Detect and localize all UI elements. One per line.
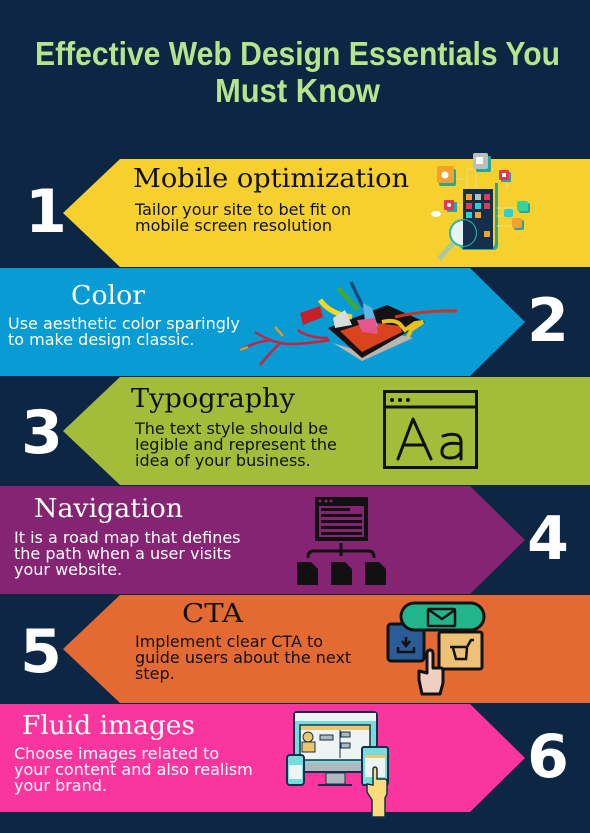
text: color: Use aesthetic color sparingly: [8, 314, 240, 333]
panel: mobile optimization: [25, 153, 590, 267]
text: typography: [134, 419, 337, 470]
heading: fluid images: Fluid images: [22, 711, 195, 741]
panel: fluid images: [0, 704, 569, 817]
text: cta: Implement clear CTA to: [135, 632, 323, 651]
icon: mobile apps: [431, 153, 530, 259]
icon: typeface window: [384, 392, 477, 468]
illustration: paint splash: [240, 282, 457, 365]
text: color: [8, 314, 240, 349]
number 3: 3: [21, 398, 63, 468]
heading: typography: Typography: [131, 384, 295, 414]
title: Must Know: [215, 72, 380, 109]
text: typography: legible and represent the: [135, 435, 337, 454]
heading: cta: CTA: [182, 599, 244, 629]
text: fluid images: your brand.: [14, 776, 107, 795]
text: navigation: [14, 528, 241, 579]
text: typography: idea of your business.: [135, 451, 311, 470]
icon: site map: [297, 497, 386, 585]
number 2: 2: [527, 286, 569, 356]
number 4: 4: [527, 504, 569, 574]
text: navigation: It is a road map that defines: [14, 528, 241, 547]
panel: typography: [21, 377, 590, 485]
text: cta: step.: [135, 664, 175, 683]
text: navigation: the path when a user visits: [14, 544, 231, 563]
title: [35, 35, 560, 109]
text: color: to make design classic.: [8, 330, 194, 349]
text: typography: The text style should be: [134, 419, 328, 438]
text: fluid images: [14, 744, 253, 795]
heading: mobile optimization: Mobile optimization: [133, 164, 409, 194]
heading: color: Color: [71, 281, 146, 311]
text: mobile optimization: Tailor your site to bet fit on: [134, 200, 351, 219]
text: mobile optimization: [134, 200, 351, 235]
number 5: 5: [20, 617, 62, 687]
text: cta: guide users about the next: [135, 648, 351, 667]
text: fluid images: your content and also realism: [14, 760, 253, 779]
icon: call to action: [388, 603, 484, 694]
text: navigation: your website.: [14, 560, 122, 579]
heading: navigation: Navigation: [34, 494, 183, 524]
panel: cta: [20, 595, 590, 703]
number 6: 6: [527, 722, 569, 792]
number 1: 1: [25, 177, 67, 247]
text: cta: [135, 632, 351, 683]
icon: responsive devices: [287, 712, 388, 817]
text: mobile optimization: mobile screen resolution: [135, 216, 332, 235]
panel: color: [0, 268, 569, 376]
text: fluid images: Choose images related to: [14, 744, 219, 763]
panel: navigation: [0, 486, 569, 594]
